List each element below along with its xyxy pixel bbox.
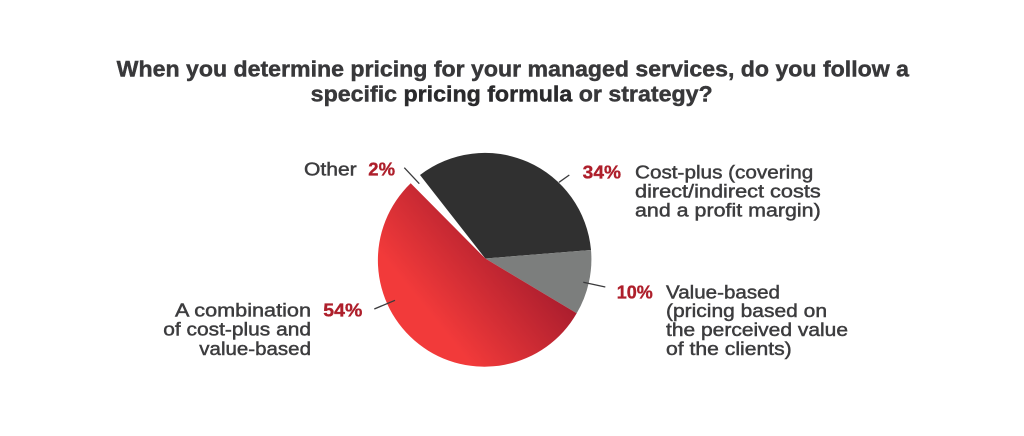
label: cost-plus: Cost-plus (covering bbox=[635, 162, 813, 182]
title bbox=[117, 57, 910, 107]
label: cost-plus bbox=[583, 162, 821, 221]
label: cost-plus: direct/indirect costs bbox=[635, 182, 821, 202]
label: value-based: (pricing based on bbox=[666, 301, 827, 321]
leader: value-based bbox=[583, 282, 605, 287]
label: value-based: of the clients) bbox=[666, 339, 792, 359]
slice: combination 54% bbox=[378, 183, 577, 367]
label: value-based bbox=[617, 282, 848, 359]
title: specific pricing formula or strategy? bbox=[311, 82, 713, 107]
label: value-based: Value-based bbox=[666, 282, 780, 302]
label: cost-plus: and a profit margin) bbox=[635, 201, 821, 221]
slice: value-based 10% bbox=[485, 250, 591, 313]
leader: other bbox=[404, 168, 419, 184]
label: cost-plus: 34% bbox=[583, 162, 621, 182]
title: When you determine pricing for your managed services, do you follow a bbox=[117, 57, 910, 82]
label: combination: value-based bbox=[199, 339, 311, 359]
leader: cost-plus bbox=[559, 175, 569, 182]
label: combination: A combination bbox=[175, 301, 311, 321]
label: other: Other bbox=[304, 160, 357, 180]
label: value-based: 10% bbox=[617, 282, 653, 302]
slice: cost-plus 34% bbox=[420, 153, 591, 258]
label: combination: of cost-plus and bbox=[163, 320, 311, 340]
leader: combination bbox=[374, 300, 395, 309]
label: other bbox=[304, 160, 395, 180]
label: other: 2% bbox=[368, 160, 395, 180]
label: value-based: the perceived value bbox=[666, 320, 848, 340]
label: combination: 54% bbox=[323, 301, 362, 321]
label: combination bbox=[163, 301, 362, 359]
pie chart bbox=[378, 153, 591, 367]
